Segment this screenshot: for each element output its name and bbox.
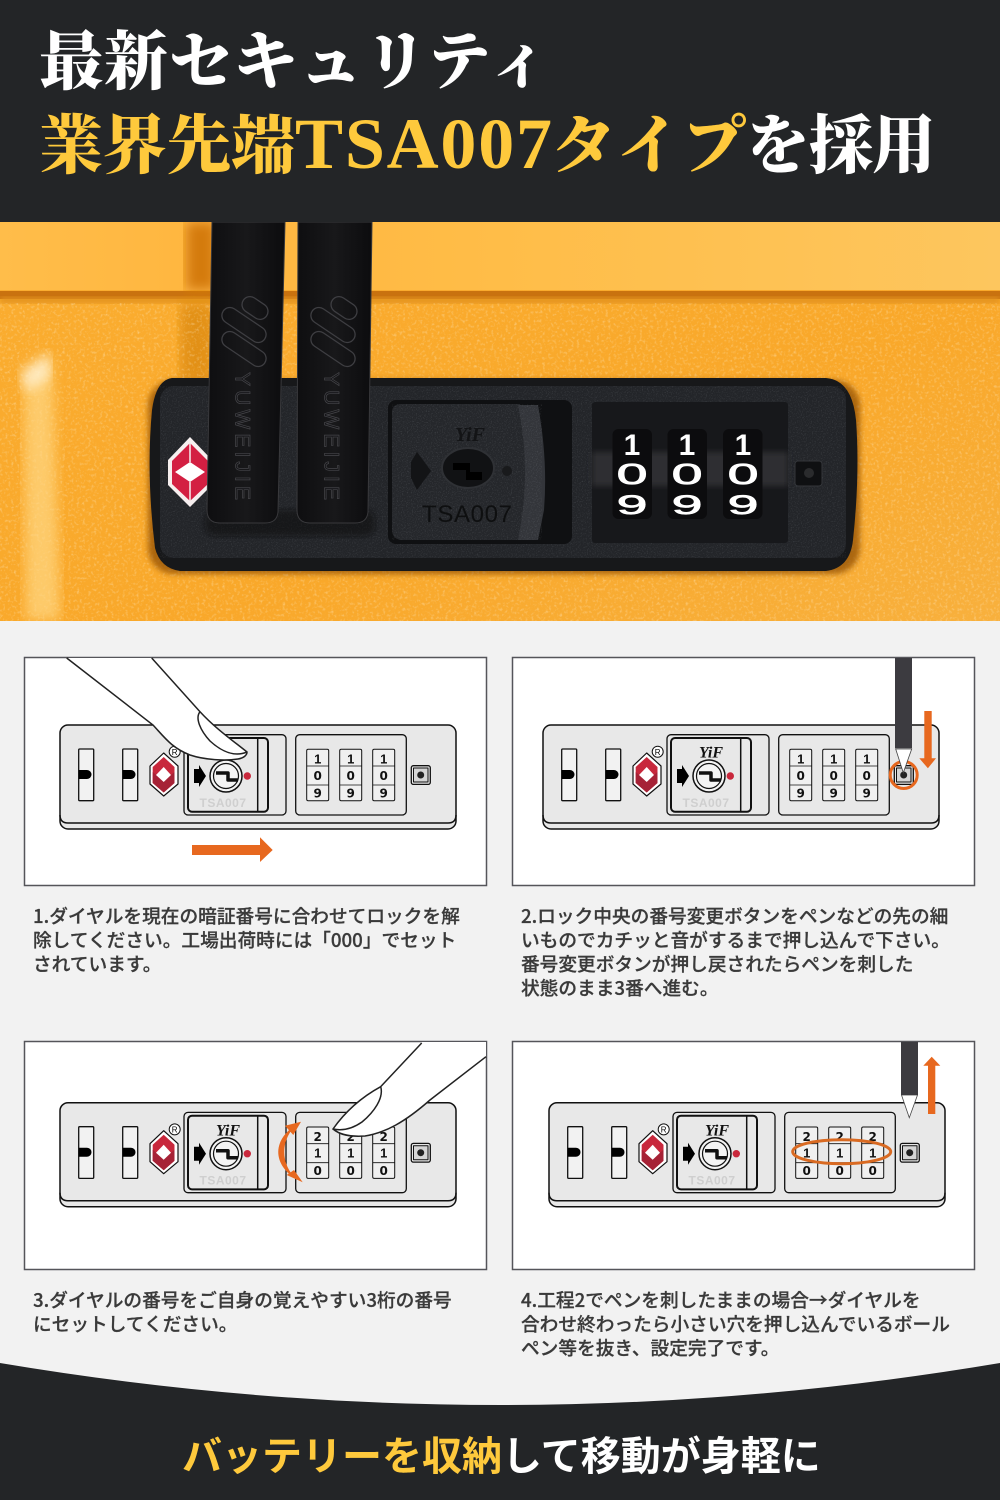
lock diagram 4: 0 — [869, 1164, 877, 1178]
lock diagram 1: 9 — [314, 786, 322, 800]
lock diagram 1: YiF — [216, 745, 240, 762]
lock diagram 4: TSA007 — [688, 1174, 736, 1188]
lock diagram 3: 1 — [314, 1146, 321, 1161]
lock diagram 2: 9 — [797, 786, 805, 800]
lock diagram 4: 1 — [869, 1146, 876, 1161]
lock diagram 1: 1 — [380, 752, 387, 766]
step 4 text: 4.工程2でペンを刺したままの場合→ダイヤルを — [521, 1286, 921, 1313]
lock diagram 2: 0 — [830, 769, 838, 783]
lock diagram 1: 9 — [380, 786, 388, 800]
step 3 text — [33, 1286, 452, 1337]
wheel 2: 0 — [672, 459, 702, 490]
icon: orange ellipse around dials — [793, 1140, 891, 1164]
lock diagram 3: 2 — [347, 1130, 355, 1144]
lock diagram 4: 1 — [836, 1146, 843, 1161]
lock diagram 4: 2 — [803, 1130, 811, 1144]
wheel 3: 9 — [728, 490, 758, 520]
lock diagram 4: 2 — [869, 1130, 877, 1144]
TSA logo — [168, 437, 208, 507]
step 2 text: 番号変更ボタンが押し戻されたらペンを刺した — [521, 950, 913, 977]
strap 1 brand: YUWEIJIE — [230, 372, 253, 500]
title line 2: 業界先端 — [39, 111, 295, 182]
lock diagram 3: TSA007 — [199, 1174, 247, 1188]
arrow: down — [919, 711, 936, 768]
wheel 2: 9 — [672, 490, 702, 520]
wheel 3: 0 — [728, 459, 758, 490]
strap shadows — [205, 510, 375, 536]
strap 2 — [297, 222, 372, 523]
panel 3: set dials — [24, 1042, 486, 1270]
step 3 text: 3.ダイヤルの番号をご自身の覚えやすい3桁の番号 — [33, 1286, 452, 1313]
title line 2: TSA007 — [295, 104, 552, 184]
lock shadow — [148, 380, 860, 574]
arrow: slide right — [192, 837, 273, 862]
wheel 3 — [723, 429, 762, 520]
lock diagram 4: 1 — [803, 1146, 810, 1161]
footer message: して移動が身軽に — [502, 1424, 821, 1482]
panel 4: remove pen — [512, 1042, 974, 1270]
icon: finger pressing latch — [67, 658, 247, 760]
lock diagram 2 — [543, 725, 939, 829]
footer band — [0, 1363, 1000, 1500]
lock diagram 3: 2 — [314, 1130, 322, 1144]
highlight on shell — [24, 356, 60, 620]
title line 2 — [39, 104, 936, 184]
lock diagram 1: 1 — [314, 752, 321, 766]
step 1 text — [33, 902, 460, 977]
step 4 text: 合わせ終わったら小さい穴を押し込んでいるボール — [521, 1310, 950, 1337]
lock diagram 3: YiF — [216, 1122, 240, 1139]
step 2 text — [521, 902, 950, 1001]
lock diagram 3: 0 — [347, 1164, 355, 1178]
title line 1: 最新セキュリティ — [39, 27, 551, 98]
lock diagram 2: 0 — [863, 769, 871, 783]
title line 2: を採用 — [746, 111, 936, 182]
arrow: up — [923, 1057, 940, 1114]
lock diagram 4: YiF — [705, 1122, 729, 1139]
lock diagram 1 — [60, 725, 456, 829]
lock diagram 2: TSA007 — [682, 796, 730, 810]
lock diagram 2: 1 — [797, 752, 804, 766]
lock diagram 4 — [549, 1103, 945, 1207]
lock diagram 1: 1 — [347, 752, 354, 766]
step 2 text: いものでカチッと音がするまで押し込んで下さい。 — [521, 926, 950, 953]
wheel 2 — [668, 429, 707, 520]
step 1 text: 除してください。工場出荷時には「000」でセット — [33, 926, 456, 953]
lock diagram 1: R — [172, 748, 178, 757]
lock diagram 4: R — [661, 1126, 667, 1135]
panel 1: unlock — [24, 658, 486, 886]
wheel 2: 1 — [679, 429, 695, 462]
lock diagram 3: R — [172, 1126, 178, 1135]
lock diagram 2: 1 — [863, 752, 870, 766]
footer message: バッテリーを収納 — [182, 1424, 502, 1482]
step 4 text — [521, 1286, 950, 1361]
step 4 text: ペン等を抜き、設定完了です。 — [521, 1334, 779, 1361]
step 1 text: されています。 — [33, 950, 161, 977]
icon: pen lifted — [901, 1042, 918, 1118]
keyhole — [442, 448, 494, 488]
arrow: rotate dials — [278, 1122, 303, 1182]
lock diagram 1: TSA007 — [199, 796, 247, 810]
lock body — [150, 378, 857, 571]
lock diagram 4: 2 — [836, 1130, 844, 1144]
strap 1 — [207, 222, 285, 523]
dial recess — [592, 402, 788, 543]
wheel 1: 0 — [617, 459, 647, 490]
lock diagram 3: 0 — [380, 1164, 388, 1178]
wheel 3: 1 — [735, 429, 751, 462]
step 1 text: 1.ダイヤルを現在の暗証番号に合わせてロックを解 — [33, 902, 460, 929]
step 3 text: にセットしてください。 — [33, 1310, 237, 1337]
lock diagram 2: YiF — [699, 745, 723, 762]
latch label: TSA007 — [422, 501, 512, 528]
strap 2 brand: YUWEIJIE — [319, 372, 342, 500]
lock diagram 3: 0 — [314, 1164, 322, 1178]
latch slider — [388, 400, 572, 544]
lock diagram 3: 1 — [347, 1146, 354, 1161]
lock diagram 3: 1 — [380, 1146, 387, 1161]
lock diagram 1: 9 — [347, 786, 355, 800]
lock diagram 1: 0 — [347, 769, 355, 783]
lock diagram 2: 9 — [863, 786, 871, 800]
lock diagram 2: 1 — [830, 752, 837, 766]
lock diagram 4: 0 — [836, 1164, 844, 1178]
header band — [0, 0, 1000, 222]
icon: pen — [895, 658, 912, 773]
step 2 text: 状態のまま3番へ進む。 — [521, 974, 719, 1001]
wheel 1: 1 — [624, 429, 640, 462]
panel 2: press button — [512, 658, 974, 886]
wheel 1 — [612, 429, 652, 520]
title line 2: タイプ — [552, 111, 746, 182]
lock diagram 3 — [60, 1103, 456, 1207]
lock diagram 2: 0 — [797, 769, 805, 783]
latch brand: YiF — [455, 424, 486, 446]
lock diagram 1: 0 — [314, 769, 322, 783]
icon: orange ring around button — [890, 762, 917, 788]
hero photo: TSA lock on orange suitcase — [0, 222, 1000, 621]
lock diagram 2: R — [655, 748, 661, 757]
lock diagram 4: 0 — [803, 1164, 811, 1178]
icon: finger turning dial — [333, 1042, 486, 1136]
arrow mark — [411, 452, 431, 490]
lock diagram 1: 0 — [380, 769, 388, 783]
wheel 1: 9 — [617, 490, 647, 520]
reset button — [795, 461, 822, 486]
lock diagram 3: 2 — [380, 1130, 388, 1144]
step 2 text: 2.ロック中央の番号変更ボタンをペンなどの先の細 — [521, 902, 948, 929]
lock diagram 2: 9 — [830, 786, 838, 800]
